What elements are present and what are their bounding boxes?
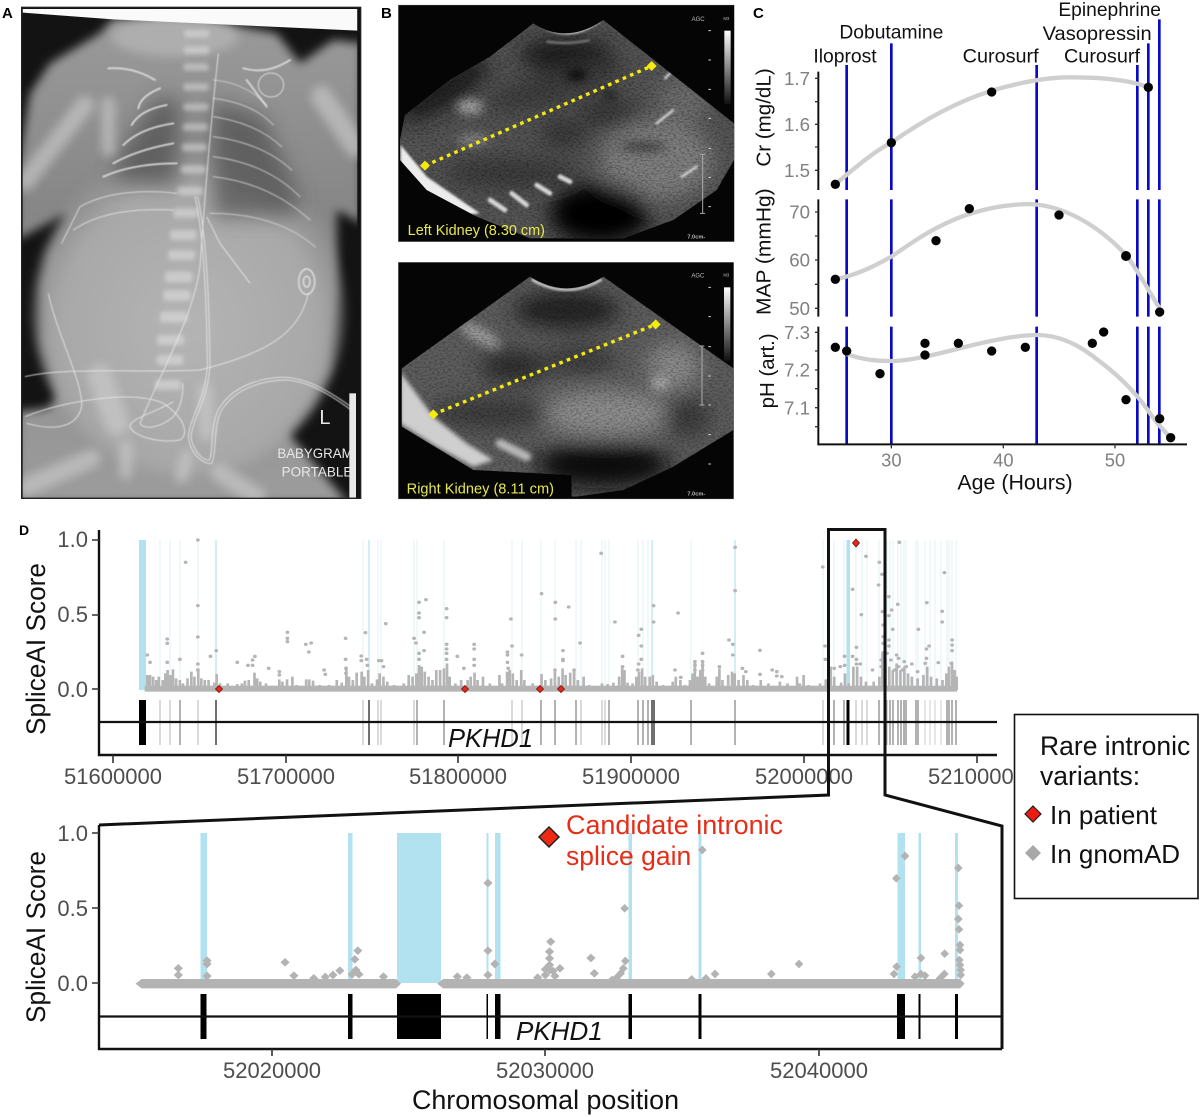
gnomAD variant points: left half (145, 540, 600, 692)
x axis labels: 30 (881, 450, 902, 471)
exon highlight bands (139, 540, 956, 690)
exon highlight bands (200, 833, 958, 983)
candidate annotation: splice gain (566, 841, 691, 871)
scale bar and AGC: AGC (692, 17, 705, 23)
medication labels: Vasopressin (1043, 24, 1152, 45)
legend title (1040, 731, 1190, 791)
white film edge (23, 9, 357, 31)
caption: right kidney: Right Kidney (8.11 cm) (407, 481, 554, 497)
gene name: PKHD1 (516, 1016, 603, 1046)
panel D top: whole-gene SpliceAI plot (21, 527, 1026, 789)
measurement line (428, 319, 661, 419)
legend: in gnomAD: In gnomAD (1050, 839, 1180, 869)
x tick labels: 52100000 (928, 764, 1026, 789)
chart: arterial pH: 7.1 (784, 397, 810, 418)
panel D bottom: zoomed SpliceAI plot (21, 810, 1002, 1115)
x tick labels (223, 1058, 868, 1083)
legend: in patient: In patient (1050, 800, 1158, 830)
chart: mean arterial pressure: MAP (mmHg) (753, 188, 776, 315)
y tick labels: 0.5 (57, 896, 88, 921)
chart: arterial pH (756, 322, 1187, 448)
chart: creatinine: 1.6 (784, 114, 810, 135)
chest electrode (258, 73, 315, 294)
film label: PORTABLE (282, 464, 352, 480)
panel A: babygram X-ray (17, 7, 362, 503)
abdomen (32, 143, 345, 477)
x tick labels: 51800000 (409, 764, 507, 789)
film label (278, 410, 350, 476)
x axis title: Chromosomal position (412, 1085, 679, 1115)
x axis labels (881, 450, 1125, 494)
medication labels: Iloprost (813, 46, 877, 67)
panel label: B: B (381, 5, 392, 22)
legend (1014, 714, 1198, 898)
gene track: exons (200, 994, 958, 1039)
panel label: D: D (19, 522, 29, 538)
medication labels: Curosurf (963, 46, 1039, 67)
gene line (99, 1015, 1002, 1018)
y tick labels: 0.0 (57, 971, 88, 996)
x tick labels: 51600000 (64, 764, 162, 789)
spine (155, 30, 209, 390)
axes (92, 530, 997, 763)
clavicles (108, 60, 290, 107)
x tick labels: 52030000 (496, 1058, 594, 1083)
y tick labels: 0.5 (57, 602, 88, 627)
panel label: A: A (2, 5, 13, 22)
film label: BABYGRAM (277, 445, 353, 461)
lungs (110, 97, 300, 217)
chart: mean arterial pressure: 60 (789, 250, 810, 271)
scale bar and AGC: M3 (723, 273, 730, 278)
film label: L (319, 407, 330, 429)
scale bar and AGC: M3 (723, 16, 730, 21)
panel label: C: C (753, 5, 764, 22)
x tick labels: 51900000 (582, 764, 680, 789)
gene line (99, 721, 997, 723)
patient variants (216, 539, 860, 692)
gnomAD variants: right half (600, 846, 965, 988)
chart: creatinine: 1.7 (784, 68, 810, 89)
medication labels: Dobutamine (839, 22, 943, 43)
gnomAD variant points: right half (600, 542, 957, 692)
gnomAD variants: left half (135, 879, 600, 988)
axes (92, 825, 1002, 1056)
y tick labels (57, 821, 88, 996)
measurement line (420, 61, 657, 171)
candidate annotation: Candidate intronic (566, 810, 783, 840)
scale bar and AGC (687, 273, 730, 497)
x tick labels: 52000000 (755, 764, 853, 789)
x tick labels: 51700000 (237, 764, 335, 789)
x tick labels (64, 764, 1026, 789)
x axis labels: 40 (993, 450, 1014, 471)
x tick labels: 52020000 (223, 1058, 321, 1083)
medication labels: Curosurf (1064, 46, 1141, 67)
chart: mean arterial pressure (753, 188, 1164, 319)
arm and pelvic bones (25, 97, 356, 497)
scale bar and AGC: 7.0cm- (687, 235, 705, 241)
candidate variant marker (539, 827, 559, 847)
chart: arterial pH: pH (art.) (756, 333, 779, 408)
x axis labels: 50 (1105, 450, 1125, 471)
neck (112, 17, 238, 57)
y tick labels: 1.0 (57, 527, 88, 552)
scale bar and AGC: AGC (691, 273, 705, 279)
y axis title: SpliceAI Score (21, 563, 51, 735)
chart: mean arterial pressure: 70 (789, 202, 810, 223)
panel C: clinical time series (753, 0, 1187, 494)
ultrasound: left kidney (389, 5, 734, 243)
medication labels (813, 0, 1161, 67)
legend title: Rare intronic (1040, 731, 1190, 761)
x tick labels: 52040000 (770, 1058, 868, 1083)
zoom outline connecting plots (99, 530, 1002, 1049)
scale bar and AGC: 7.0cm- (687, 491, 705, 497)
candidate annotation (566, 810, 783, 871)
gene track: exons (139, 700, 956, 745)
x axis labels: Age (Hours) (957, 470, 1073, 494)
y axis title: SpliceAI Score (21, 851, 51, 1023)
chart: creatinine: 1.5 (784, 160, 810, 181)
y tick labels (57, 527, 88, 702)
medication labels: Epinephrine (1058, 0, 1161, 21)
gene name: PKHD1 (448, 725, 533, 753)
scale bar and AGC (687, 16, 731, 241)
left ribs (62, 88, 177, 243)
y tick labels: 0.0 (57, 677, 88, 702)
right ribs (210, 80, 315, 247)
legend title: variants: (1040, 761, 1140, 791)
caption: left kidney: Left Kidney (8.30 cm) (408, 223, 545, 239)
y tick labels: 1.0 (57, 821, 88, 846)
ECG leads and catheter lines (25, 53, 353, 463)
panel B: kidney ultrasounds (389, 5, 734, 499)
chart: creatinine: Cr (mg/dL) (753, 68, 776, 167)
chart: creatinine (753, 68, 1153, 190)
chart: mean arterial pressure: 50 (789, 298, 810, 319)
chart: arterial pH: 7.2 (784, 360, 810, 381)
ultrasound: right kidney (398, 262, 734, 499)
medication event lines (847, 19, 1159, 444)
x-ray body silhouette (17, 18, 362, 503)
chart: arterial pH: 7.3 (784, 322, 810, 343)
